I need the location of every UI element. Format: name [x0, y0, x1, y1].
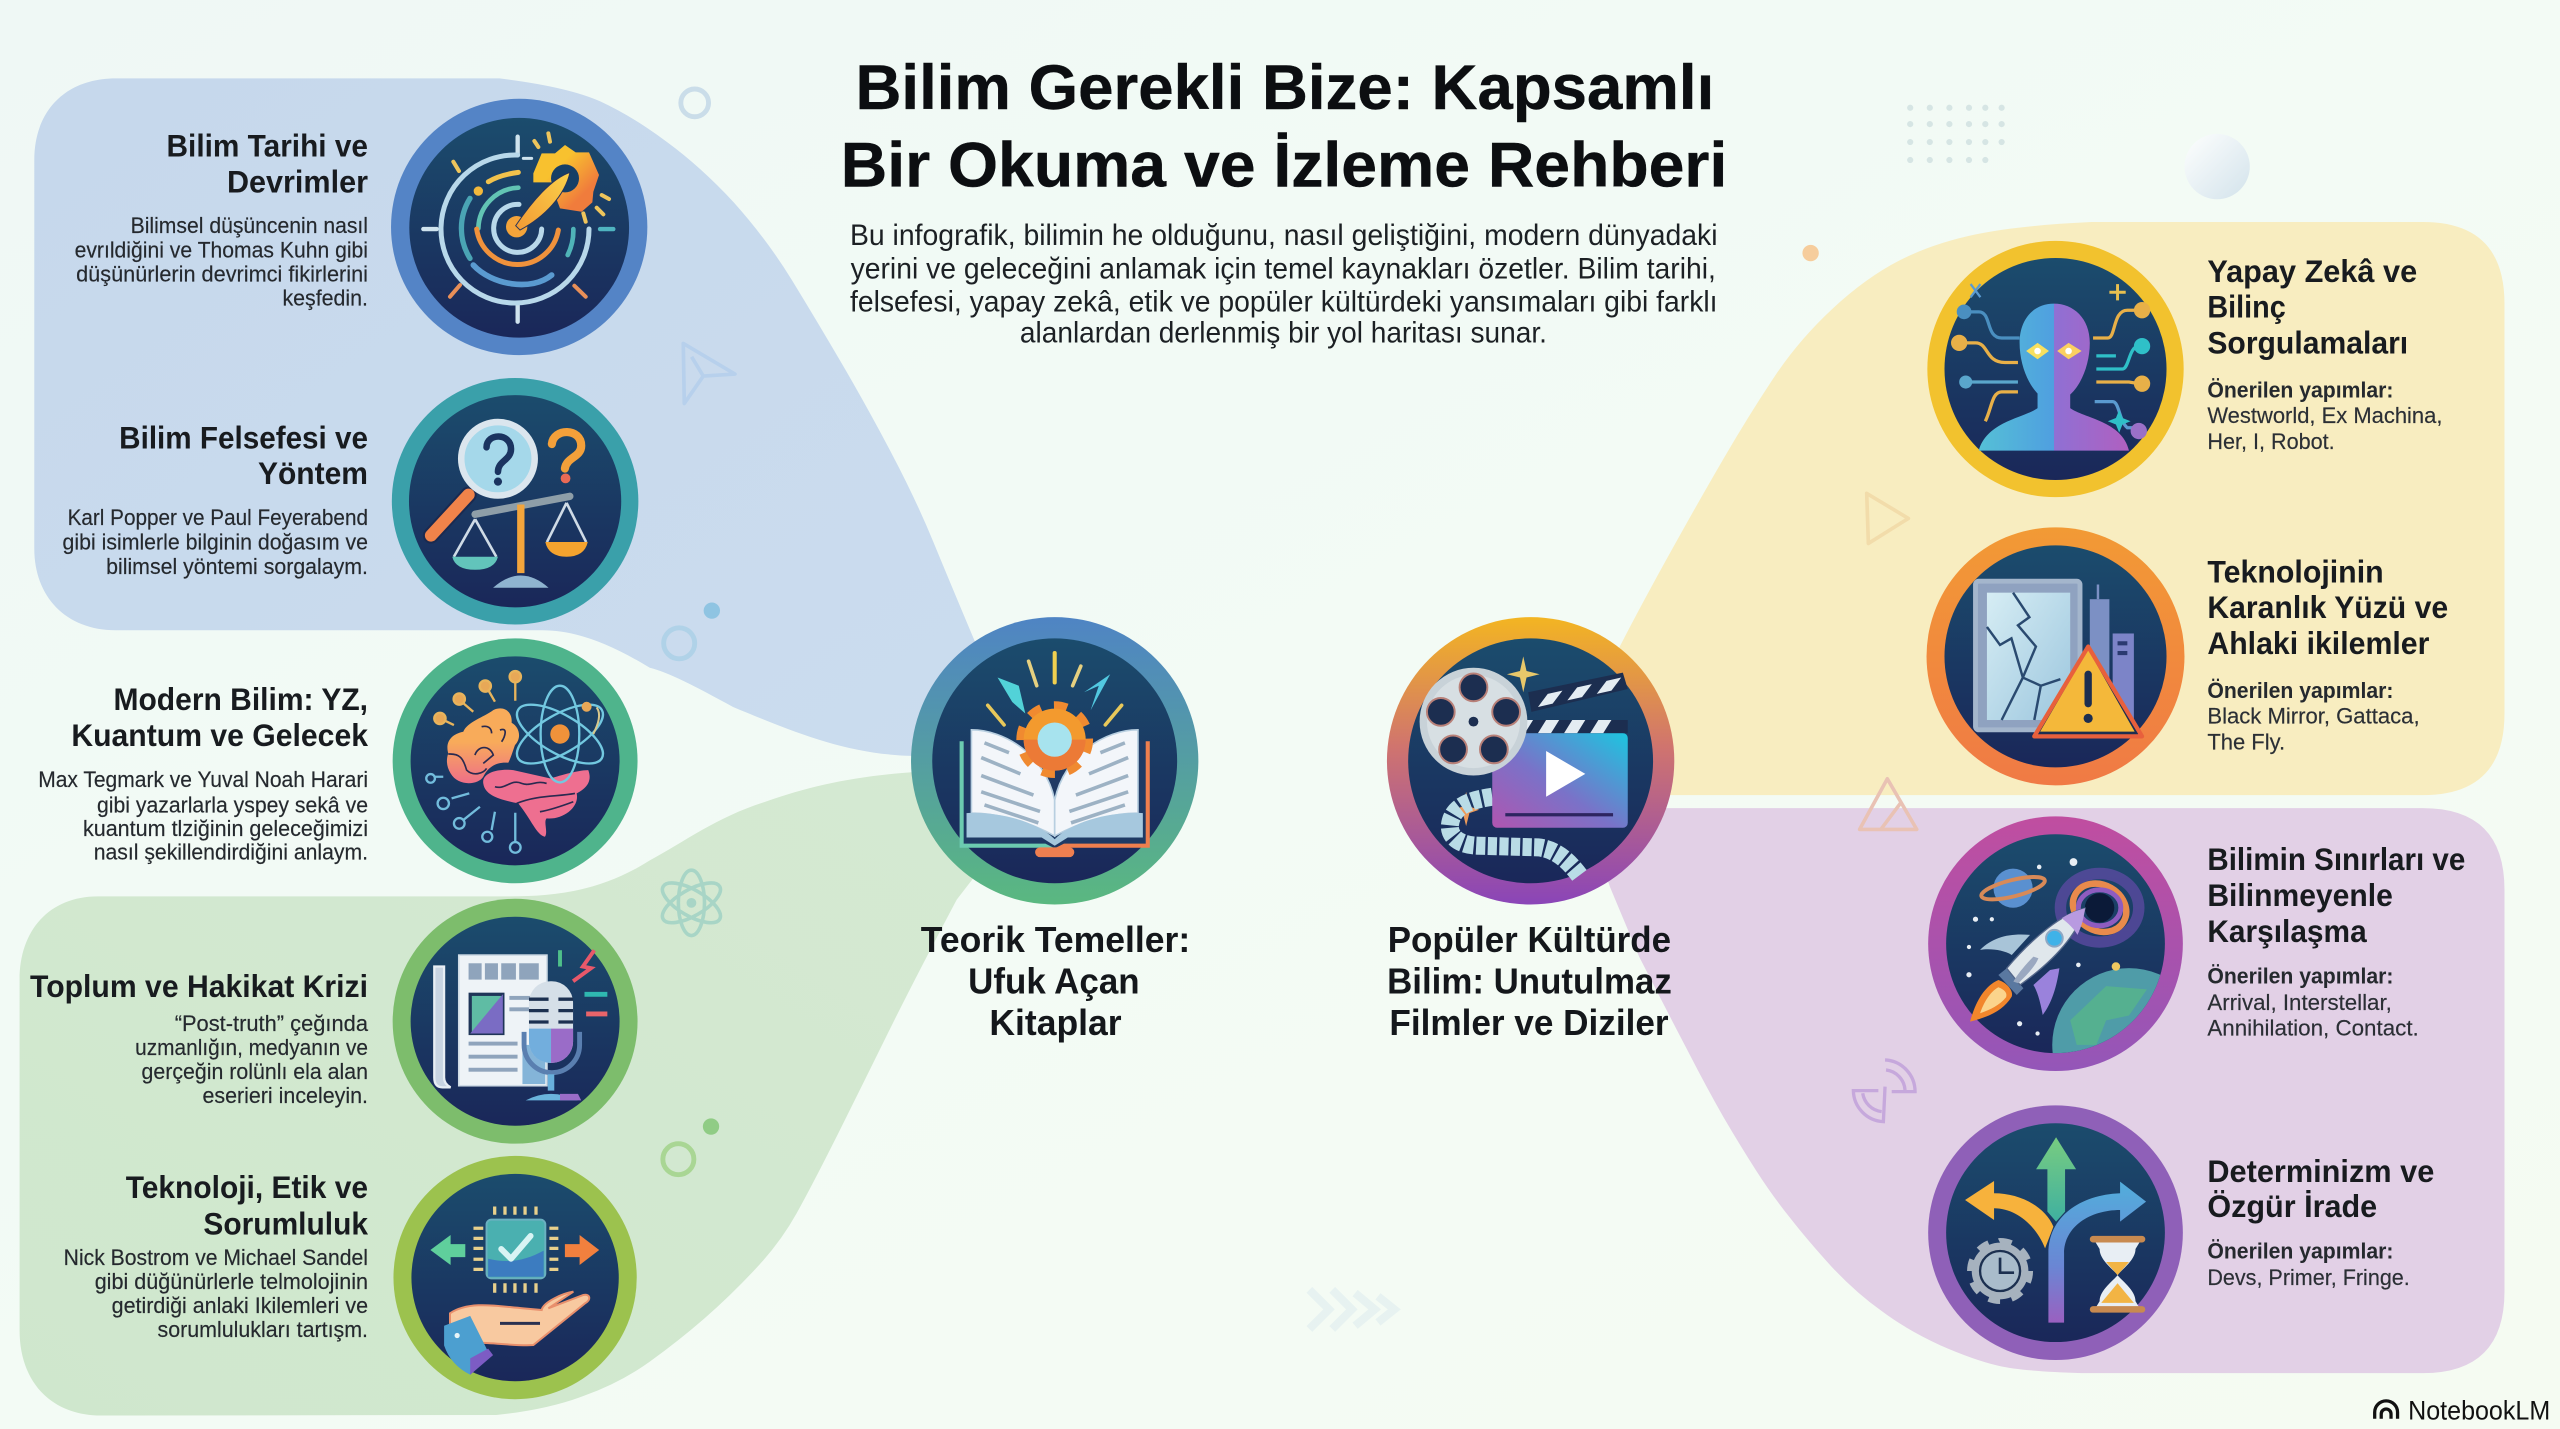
hub: Teorik Temeller	[911, 617, 1198, 1043]
text: Bilimin Sınırları works: Arrival, Interstellar,	[2207, 990, 2392, 1015]
text: Teknolojinin works: Önerilen yapımlar:	[2207, 678, 2393, 703]
heading: Yapay Zekâ ve Bilinç Sorgulamaları: Yapay Zekâ ve	[2207, 253, 2417, 289]
topic: Modern Bilim	[38, 638, 638, 883]
label: Popüler Kültürde Bilim: Filmler ve Diziler	[1389, 1002, 1669, 1043]
text: Bilim Tarihi description	[75, 213, 368, 310]
text: Teknolojinin works: The Fly.	[2207, 729, 2285, 754]
heading: Teknoloji, Etik ve Sorumluluk: Sorumluluk	[203, 1205, 368, 1241]
intro text block: yerini ve geleceğini anlamak için temel kaynakları özetler. Bilim tarihi,	[851, 252, 1716, 285]
topic: Bilim Felsefesi ve Yöntem	[63, 378, 638, 624]
text: Bilimin Sınırları works: Önerilen yapımlar:	[2207, 964, 2393, 989]
text: Teknoloji description: Nick Bostrom ve Michael Sandel	[64, 1245, 368, 1270]
intro text block	[850, 219, 1718, 349]
icon: faint chevrons decoration	[1309, 1290, 1394, 1329]
icon: target with gear	[391, 99, 647, 355]
heading: Bilimin Sınırları	[2207, 841, 2465, 949]
text: Modern Bilim description: gibi yazarlarla yspey sekâ ve	[97, 792, 368, 817]
icon: newspaper and microphone	[393, 899, 638, 1144]
heading: Bilimin Sınırları: Karşılaşma	[2207, 913, 2367, 949]
text: Bilimin Sınırları works	[2207, 964, 2419, 1041]
heading: Determinizm ve Özgür İrade: Determinizm ve	[2207, 1153, 2434, 1189]
text: Bilim Felsefesi description: gibi isimlerle bilginin doğasım ve	[63, 530, 368, 555]
heading: Bilim Tarihi ve Devrimler: Bilim Tarihi ve	[167, 128, 368, 164]
panel: green theory branch	[20, 771, 996, 1416]
text: Yapay Zekâ works: Westworld, Ex Machina,	[2207, 403, 2442, 428]
heading: Bilimin Sınırları: Bilimin Sınırları ve	[2207, 841, 2465, 877]
heading: Yapay Zekâ ve Bilinç Sorgulamaları: Sorgulamaları	[2207, 324, 2408, 360]
text: Bilim Tarihi description: Bilimsel düşüncenin nasıl	[131, 213, 368, 238]
label: Popüler Kültürde Bilim: Bilim: Unutulmaz	[1387, 960, 1672, 1001]
title	[841, 53, 1727, 201]
icon: magnifier and scales	[392, 378, 638, 624]
label: Popüler Kültürde Bilim	[1387, 919, 1672, 1043]
title: Bir Okuma ve İzleme Rehberi	[841, 131, 1727, 201]
decorative ring: blue	[664, 628, 695, 659]
heading: Teknolojinin Karanlık Yüzü	[2207, 554, 2448, 661]
icon: film reel and clapper	[1387, 617, 1674, 904]
panel: blue theory branch	[34, 78, 996, 767]
hub: Popüler Kültürde Bilim	[1387, 617, 1674, 1043]
text: Bilim Tarihi description: keşfedin.	[282, 285, 368, 310]
text: Yapay Zekâ works: Her, I, Robot.	[2207, 429, 2335, 454]
panel: purple culture branch	[1584, 808, 2504, 1373]
text: Bilim Felsefesi description: Karl Popper ve Paul Feyerabend	[68, 505, 368, 530]
text: Toplum description: “Post-truth” çeğında	[175, 1011, 369, 1036]
panel: yellow culture branch	[1608, 222, 2504, 795]
text: Teknoloji description	[64, 1245, 368, 1342]
label: Teorik Temeller	[921, 919, 1190, 1043]
text: Bilim Tarihi description: evrıldiğini ve Thomas Kuhn gibi	[75, 237, 368, 262]
heading: Bilim Felsefesi ve Yöntem: Yöntem	[258, 455, 368, 491]
logo: NotebookLM: NotebookLM	[2408, 1396, 2550, 1426]
topic: Bilimin Sınırları	[1928, 816, 2465, 1143]
text: Teknoloji description: sorumlulukları tartışm.	[158, 1317, 368, 1342]
heading: Yapay Zekâ ve Bilinç Sorgulamaları	[2207, 253, 2417, 360]
text: Yapay Zekâ works: Önerilen yapımlar:	[2207, 378, 2393, 403]
icon: triangle decoration	[1860, 779, 1917, 829]
text: Yapay Zekâ works	[2207, 378, 2442, 454]
topic: Yapay Zekâ ve Bilinç	[1927, 241, 2442, 497]
decorative dot: blue	[704, 602, 720, 619]
topic: Determinizm ve Özgür İrade	[1928, 1105, 2434, 1360]
decorative soft sphere	[2184, 134, 2250, 199]
topic: Teknolojinin Karanlık Yüzü	[1927, 527, 2448, 785]
heading: Determinizm ve Özgür İrade	[2207, 1153, 2434, 1224]
text: Determinizm works: Devs, Primer, Fringe.	[2207, 1265, 2410, 1290]
icon: chip, arrows and hand	[393, 1156, 637, 1399]
heading: Yapay Zekâ ve Bilinç Sorgulamaları: Bilinç	[2207, 289, 2286, 325]
decorative dot: orange	[1802, 245, 1819, 261]
heading: Teknoloji, Etik ve Sorumluluk: Teknoloji, Etik ve	[126, 1169, 368, 1205]
heading: Bilim Felsefesi ve Yöntem	[119, 419, 368, 491]
text: Modern Bilim description: Max Tegmark ve Yuval Noah Harari	[38, 767, 368, 792]
text: Modern Bilim description: nasıl şekillendirdiğini anlaym.	[94, 840, 368, 865]
label: Teorik Temeller: Ufuk Açan	[968, 960, 1140, 1001]
text: Toplum description: uzmanlığın, medyanın ve	[135, 1035, 368, 1060]
intro text block: alanlardan derlenmiş bir yol haritası sunar.	[1020, 316, 1547, 349]
icon: broken mirror and warning	[1927, 527, 2184, 785]
text: Modern Bilim description	[38, 767, 368, 865]
icon: atom decoration	[657, 870, 726, 936]
intro text block: felsefesi, yapay zekâ, etik ve popüler kültürdeki yansımaları gibi farklı	[850, 286, 1718, 319]
icon: rocket, planets and black hole	[1928, 816, 2183, 1071]
heading: Modern Bilim: Kuantum ve Gelecek	[71, 717, 368, 753]
heading: Teknolojinin Karanlık Yüzü: Ahlaki ikilemler	[2207, 625, 2429, 661]
title: Bilim Gerekli Bize: Kapsamlı	[856, 53, 1714, 123]
icon: dna decoration	[1853, 1060, 1915, 1122]
heading: Bilim Tarihi ve Devrimler: Devrimler	[227, 164, 368, 200]
icon: paper plane	[683, 343, 735, 403]
text: Teknoloji description: getirdiği anlaki Ikilemleri ve	[112, 1293, 368, 1318]
topic: Toplum ve Hakikat Krizi	[30, 899, 638, 1144]
text: Modern Bilim description: kuantum tlziğinin geleceğimizi	[83, 816, 368, 841]
intro text block: Bu infografik, bilimin he olduğunu, nasıl geliştiğini, modern dünyadaki	[850, 219, 1718, 252]
heading: Modern Bilim: Modern Bilim: YZ,	[113, 681, 368, 717]
heading: Determinizm ve Özgür İrade: Özgür İrade	[2207, 1188, 2377, 1224]
text: Bilim Tarihi description: düşünürlerin devrimci fikirlerini	[76, 261, 368, 286]
icon: open book with gear	[911, 617, 1198, 904]
heading: Teknolojinin Karanlık Yüzü: Teknolojinin	[2207, 554, 2384, 590]
heading: Bilim Felsefesi ve Yöntem: Bilim Felsefesi ve	[119, 419, 368, 455]
text: Bilim Felsefesi description: bilimsel yöntemi sorgalaym.	[106, 554, 368, 579]
text: Determinizm works: Önerilen yapımlar:	[2207, 1239, 2393, 1264]
text: Toplum description: gerçeğin rolünlı ela alan	[142, 1059, 368, 1084]
heading: Teknoloji, Etik ve Sorumluluk	[126, 1169, 368, 1241]
decorative dot: green	[703, 1118, 719, 1135]
text: Determinizm works	[2207, 1239, 2410, 1290]
text: Bilim Felsefesi description	[63, 505, 368, 579]
text: Toplum description	[135, 1011, 369, 1108]
label: Teorik Temeller: Kitaplar	[989, 1002, 1122, 1043]
text: Bilimin Sınırları works: Annihilation, Contact.	[2207, 1016, 2419, 1041]
text: Teknoloji description: gibi düğünürlerle telmolojinin	[95, 1269, 368, 1294]
heading: Teknolojinin Karanlık Yüzü: Karanlık Yüzü ve	[2207, 589, 2448, 625]
icon: play triangle decoration	[1867, 493, 1908, 543]
heading: Bilim Tarihi ve Devrimler	[167, 128, 368, 200]
topic: Bilim Tarihi ve Devrimler	[75, 99, 647, 355]
decorative ring: green	[663, 1144, 694, 1175]
heading: Bilimin Sınırları: Bilinmeyenle	[2207, 877, 2393, 913]
text: Teknolojinin works	[2207, 678, 2420, 754]
decorative dot grid	[1907, 105, 2005, 163]
decorative ring: top left	[681, 89, 709, 117]
icon: AI head with circuits	[1927, 241, 2184, 497]
text: Teknolojinin works: Black Mirror, Gattaca,	[2207, 703, 2420, 728]
heading: Modern Bilim	[71, 681, 368, 753]
label: Teorik Temeller: Teorik Temeller:	[921, 919, 1190, 960]
text: Toplum description: eserieri inceleyin.	[202, 1083, 368, 1108]
label: Popüler Kültürde Bilim: Popüler Kültürde	[1388, 919, 1671, 960]
icon: brain and atom	[393, 638, 638, 883]
icon: diverging arrows, gear and hourglass	[1928, 1105, 2183, 1360]
topic: Teknoloji, Etik ve Sorumluluk	[64, 1156, 637, 1399]
heading: Toplum ve Hakikat Krizi: Toplum ve Hakikat Krizi	[30, 968, 368, 1004]
